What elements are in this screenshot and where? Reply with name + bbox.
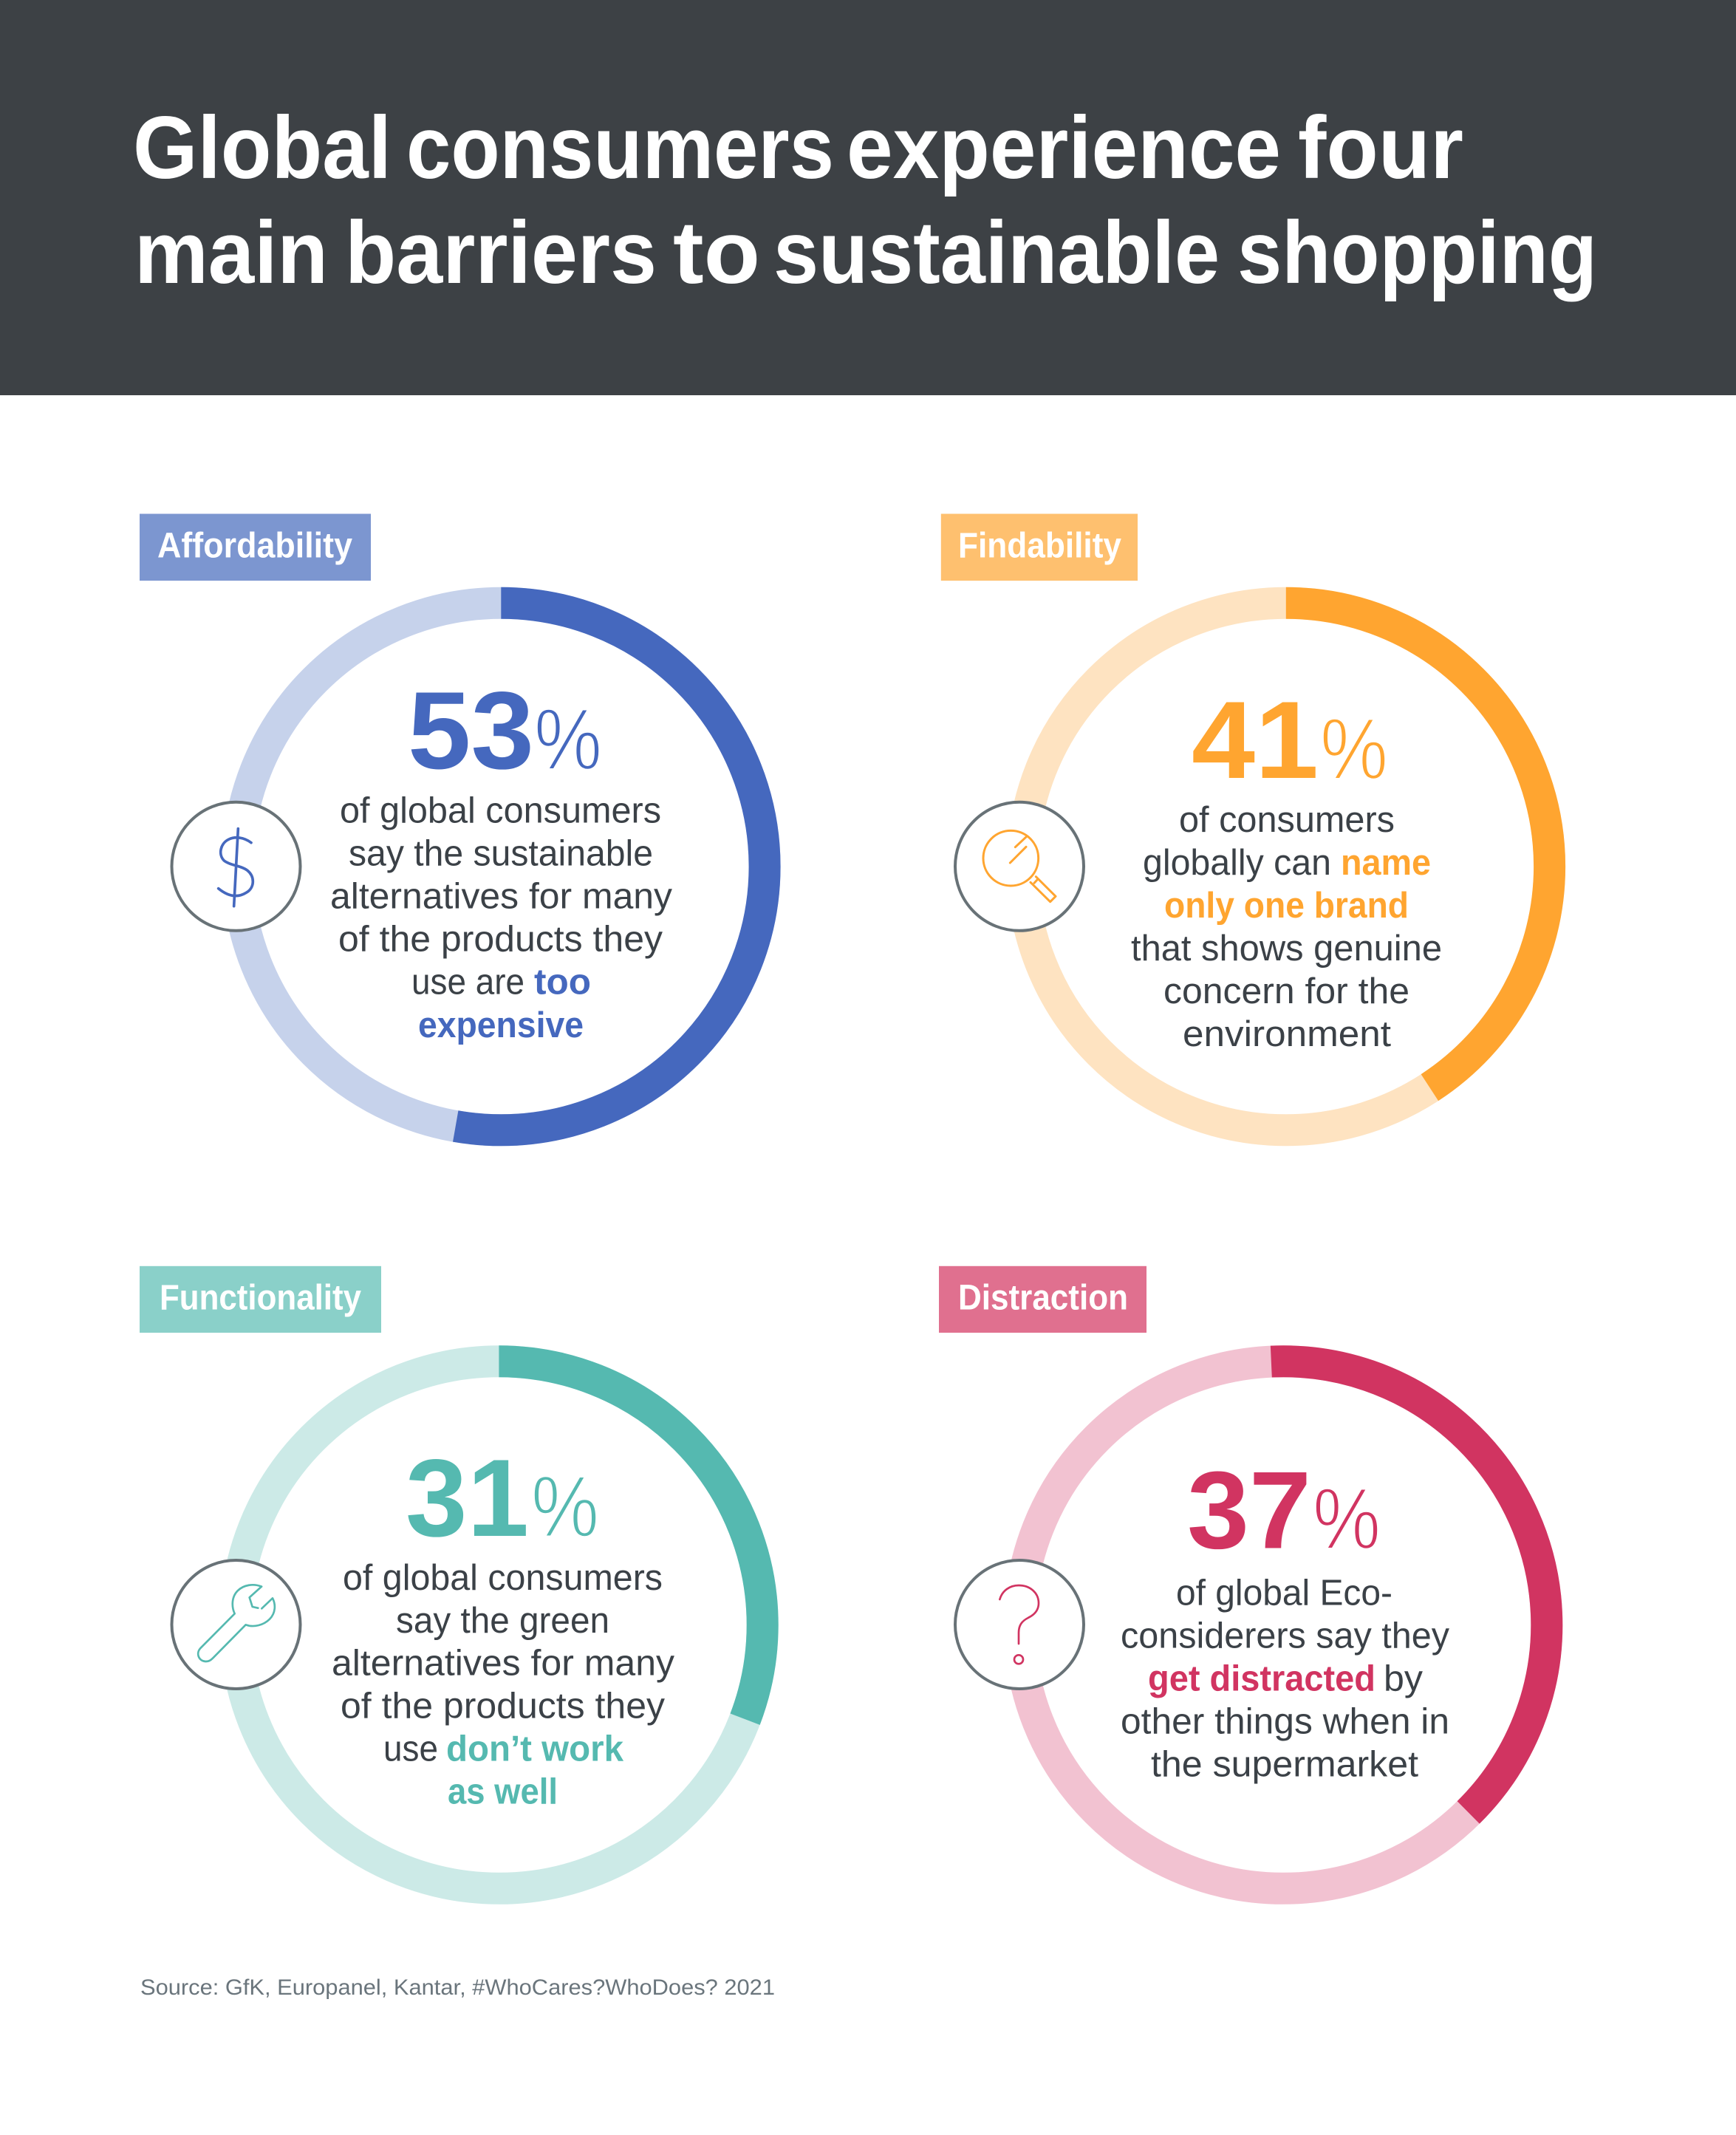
text block: distraction: other things when in [1121,1701,1449,1741]
header banner [0,0,1736,395]
stat: 37%: % [1313,1471,1381,1568]
text block: distraction: the supermarket [1151,1744,1418,1784]
stat: 31%: % [531,1458,599,1556]
text block: functionality: of global consumers [343,1558,663,1598]
icon: question mark [955,1560,1084,1689]
title: four [1298,98,1463,197]
donut chart: 41% [1022,603,1550,1130]
stat: 41%: 41 [1192,678,1319,802]
text block: functionality: as well [448,1772,558,1812]
stat: 41% [1192,678,1388,802]
panel: functionality [140,1266,762,1888]
icon: dollar [171,802,300,931]
text block: findability: of consumers [1179,800,1395,840]
text block: functionality: of the products they [341,1687,665,1726]
badge: Functionality [140,1266,381,1333]
title: barriers [345,203,657,302]
panel: findability [941,514,1550,1130]
icon: magnifying glass [955,802,1084,931]
text block: findability: that shows genuine [1131,929,1442,969]
badge: Findability: Findability [958,527,1121,566]
text block: functionality: use [383,1729,438,1769]
text block: findability: name [1341,843,1431,883]
text block: affordability: use are [411,963,524,1002]
text block: functionality: alternatives for many [332,1644,675,1684]
badge: Functionality: Functionality [160,1278,361,1317]
title: Global [133,98,392,197]
text block: distraction: by [1384,1659,1423,1698]
donut chart: 31% [236,1362,762,1888]
title: sustainable [773,203,1220,302]
text block: affordability: expensive [418,1005,584,1045]
stat: 53%: % [534,691,602,789]
text block: affordability: alternatives for many [330,876,673,916]
badge: Distraction [939,1266,1146,1333]
text block: distraction: get distracted [1148,1659,1376,1698]
stat: 41%: % [1320,700,1388,798]
stat: 31% [406,1436,599,1560]
text block: distraction: considerers say they [1121,1616,1449,1656]
text block: findability: globally can [1143,843,1331,883]
text block: distraction: of global Eco- [1176,1573,1392,1613]
panel: affordability [140,514,765,1130]
text block: affordability [330,790,673,1045]
text block: findability: concern for the [1163,971,1409,1011]
title: shopping [1237,203,1597,302]
badge: Affordability [140,514,371,581]
text block: distraction [1121,1573,1449,1784]
stat: 53%: 53 [408,669,534,792]
text block: affordability: too [534,963,591,1002]
panel: distraction [939,1266,1559,1900]
title: experience [847,98,1281,197]
text block: findability [1131,800,1442,1054]
donut chart: 37% [1008,1350,1559,1900]
badge: Affordability: Affordability [157,527,352,566]
text block: affordability: of the products they [338,919,663,959]
text block: findability: environment [1183,1014,1391,1054]
text block: affordability: of global consumers [340,790,661,830]
text block: functionality: say the green [396,1601,609,1641]
stat: 37%: 37 [1187,1448,1311,1572]
stat: 53% [408,669,602,792]
title: to [673,203,760,302]
stat: 31%: 31 [406,1436,529,1560]
text block: functionality [332,1558,675,1812]
stat: 37% [1187,1448,1381,1572]
badge: Distraction: Distraction [958,1278,1128,1317]
title: main [134,203,328,302]
text block: affordability: say the sustainable [349,833,653,873]
title [133,98,1597,302]
source note: Source: GfK, Europanel, Kantar, #WhoCares?WhoDoes? 2021 [140,1975,775,2000]
badge: Findability [941,514,1138,581]
text block: findability: only one brand [1164,886,1409,926]
text block: functionality: don’t work [446,1729,624,1769]
donut chart: 53% [238,603,765,1130]
icon: wrench [171,1560,300,1689]
title: consumers [406,98,834,197]
